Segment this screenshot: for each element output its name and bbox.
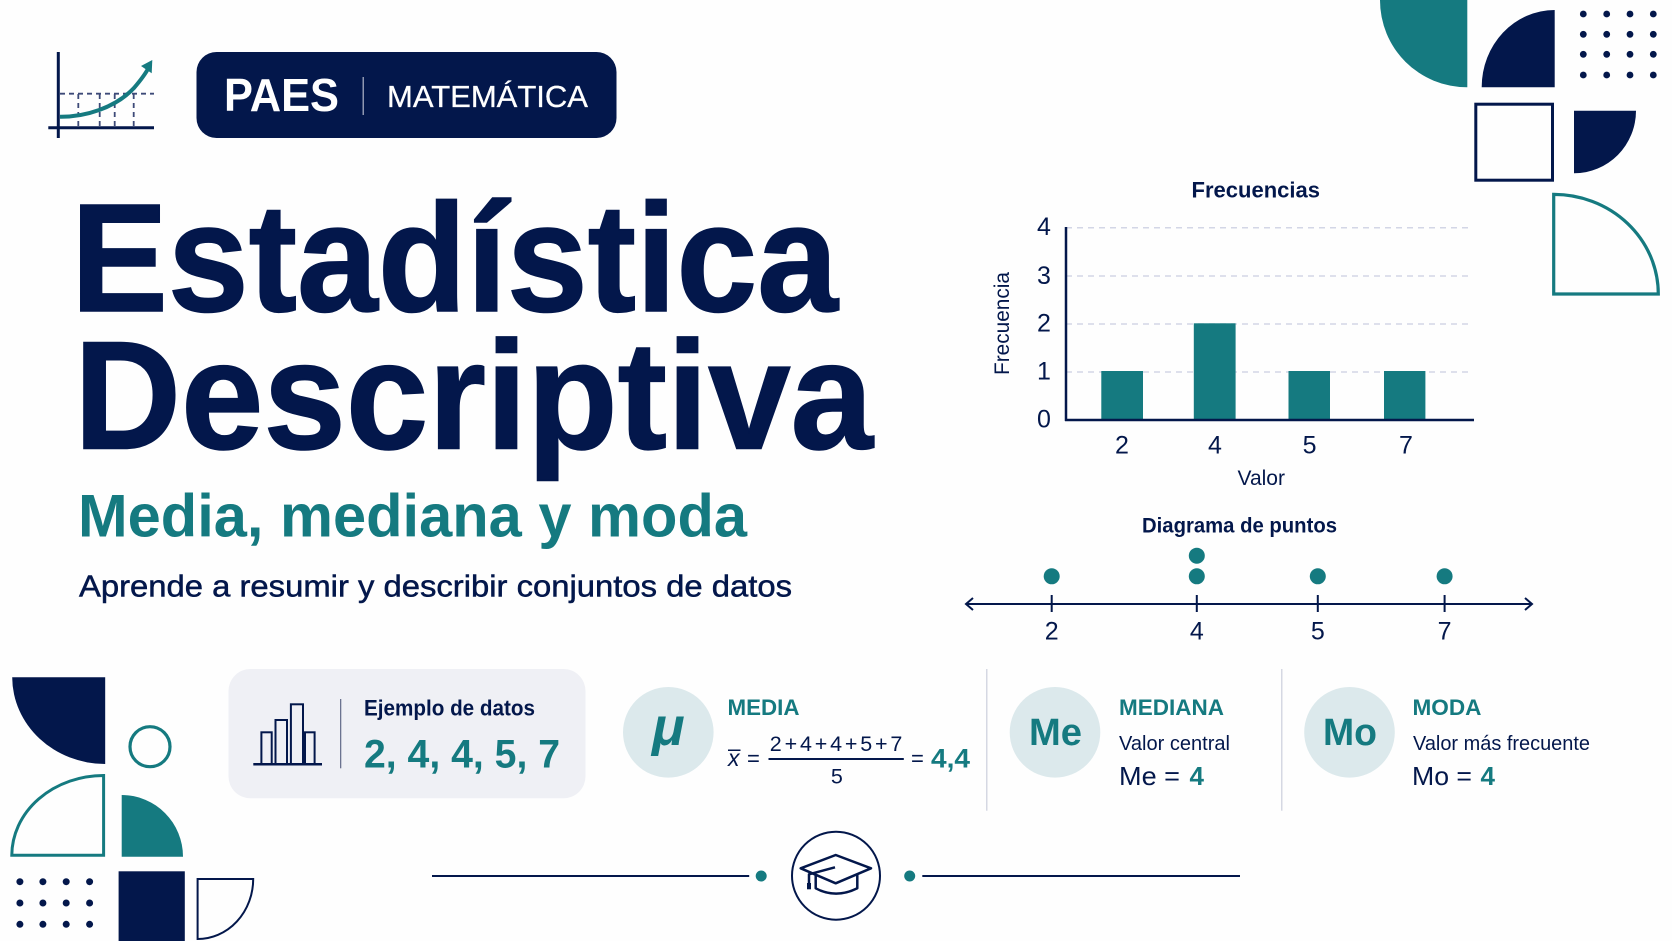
- formula: x: [727, 745, 741, 771]
- footer divider with graduation cap: [432, 832, 1240, 920]
- data values: 2, 4, 4, 5, 7: [364, 733, 560, 777]
- y axis labels: [1037, 213, 1051, 434]
- decoration: top right shapes: [1380, 0, 1658, 294]
- number line labels: 5: [1311, 617, 1325, 645]
- y axis labels: 1: [1037, 358, 1051, 386]
- value: mediana: Me =: [1119, 761, 1180, 791]
- x axis labels: 4: [1208, 431, 1222, 459]
- badge: PAES Matemática: MATEMÁTICA: [387, 79, 588, 114]
- y axis labels: 3: [1037, 262, 1051, 290]
- icon: Me: Me: [1029, 712, 1082, 754]
- panel: ejemplo de datos: [228, 669, 586, 798]
- description: moda: Valor más frecuente: [1413, 733, 1590, 755]
- subtitle: Media, mediana y moda: [78, 482, 748, 550]
- panel: mediana: [1010, 687, 1230, 791]
- icon: Mo: [1304, 687, 1395, 778]
- heading: mediana: MEDIANA: [1119, 695, 1224, 720]
- icon: graduation cap: [801, 855, 871, 894]
- title: Estadística: [71, 172, 839, 344]
- y axis title: Frecuencia: [991, 272, 1014, 375]
- icon: growth curve chart: [48, 52, 154, 138]
- formula: [727, 732, 970, 788]
- formula: =: [911, 746, 924, 771]
- badge: PAES Matemática: [196, 52, 616, 138]
- dot plot title: Diagrama de puntos: [1142, 515, 1337, 538]
- formula: 5: [831, 764, 843, 788]
- number line labels: 4: [1190, 617, 1204, 645]
- x axis labels: 5: [1303, 431, 1317, 459]
- panel: mediana: 4: [1190, 761, 1204, 791]
- formula: 2+4+4+5+7: [770, 732, 902, 756]
- icon: mu: [623, 687, 714, 778]
- bars: [1101, 323, 1425, 420]
- x axis title: Valor: [1238, 467, 1285, 490]
- badge: PAES Matemática: PAES: [224, 69, 339, 121]
- number line labels: [1045, 617, 1452, 645]
- title: [71, 172, 874, 482]
- x axis labels: 7: [1399, 431, 1413, 459]
- bar chart: frecuencias: [991, 177, 1474, 490]
- heading: media: MEDIA: [728, 695, 800, 720]
- icon: mu: μ: [650, 697, 685, 757]
- panel: moda: [1304, 687, 1590, 791]
- icon: Mo: Mo: [1323, 712, 1377, 754]
- y axis labels: 4: [1037, 213, 1051, 241]
- number line: [966, 595, 1532, 612]
- description: mediana: Valor central: [1119, 733, 1230, 755]
- y axis labels: 2: [1037, 310, 1051, 338]
- x axis labels: [1115, 431, 1413, 459]
- formula: 4,4: [931, 743, 970, 773]
- chart title: Frecuencias: [1192, 177, 1320, 202]
- panel label: Ejemplo de datos: [364, 696, 535, 721]
- title: Descriptiva: [74, 310, 874, 482]
- panel: media: [623, 687, 970, 788]
- icon: Me: [1010, 687, 1100, 778]
- y axis labels: 0: [1037, 406, 1051, 434]
- number line labels: 7: [1438, 617, 1452, 645]
- decoration: bottom left shapes: [12, 677, 253, 941]
- value: moda: Mo =: [1412, 761, 1472, 791]
- panel: moda: 4: [1480, 761, 1496, 791]
- x axis labels: 2: [1115, 431, 1129, 459]
- tagline: Aprende a resumir y describir conjuntos de datos: [79, 568, 792, 604]
- number line labels: 2: [1045, 617, 1059, 645]
- formula: =: [747, 746, 760, 771]
- dot plot: diagrama de puntos: [966, 515, 1532, 645]
- icon: bar chart: [253, 704, 322, 764]
- heading: moda: MODA: [1412, 695, 1482, 720]
- dots: [1044, 548, 1453, 584]
